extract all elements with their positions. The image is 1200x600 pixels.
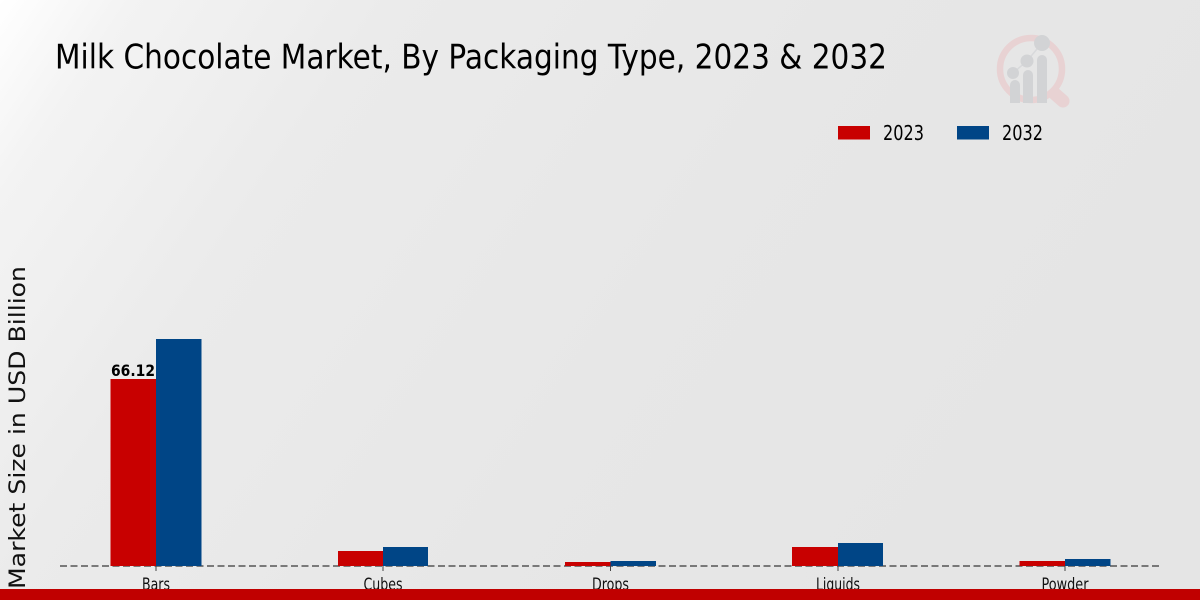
group: Bars: Bars	[142, 575, 170, 595]
legend: 2023 label: 2023	[883, 121, 924, 145]
legend: 2023 swatch	[838, 126, 870, 140]
legend	[838, 121, 1043, 145]
group: Powder: Powder	[1042, 575, 1088, 595]
watermark logo icon	[1000, 35, 1063, 103]
data label: 66.12	[111, 361, 155, 380]
title: Milk Chocolate Market, By Packaging Type, 2023 & 2032	[55, 38, 887, 78]
baseline	[60, 565, 1160, 567]
group: Liquids: Liquids	[816, 575, 860, 595]
y-axis title: Market Size in USD Billion	[6, 266, 31, 589]
bar chart	[60, 339, 1160, 595]
legend: 2032 swatch	[957, 126, 989, 140]
group: Powder	[1020, 559, 1110, 595]
legend: 2032 label: 2032	[1002, 121, 1043, 145]
group: Cubes	[338, 547, 428, 595]
group: Liquids	[792, 543, 883, 595]
group: Drops: Drops	[592, 575, 629, 595]
bottom red band	[0, 589, 1200, 600]
group: Drops	[565, 561, 656, 595]
group: Cubes: Cubes	[364, 575, 403, 595]
group: Bars	[110, 339, 202, 595]
